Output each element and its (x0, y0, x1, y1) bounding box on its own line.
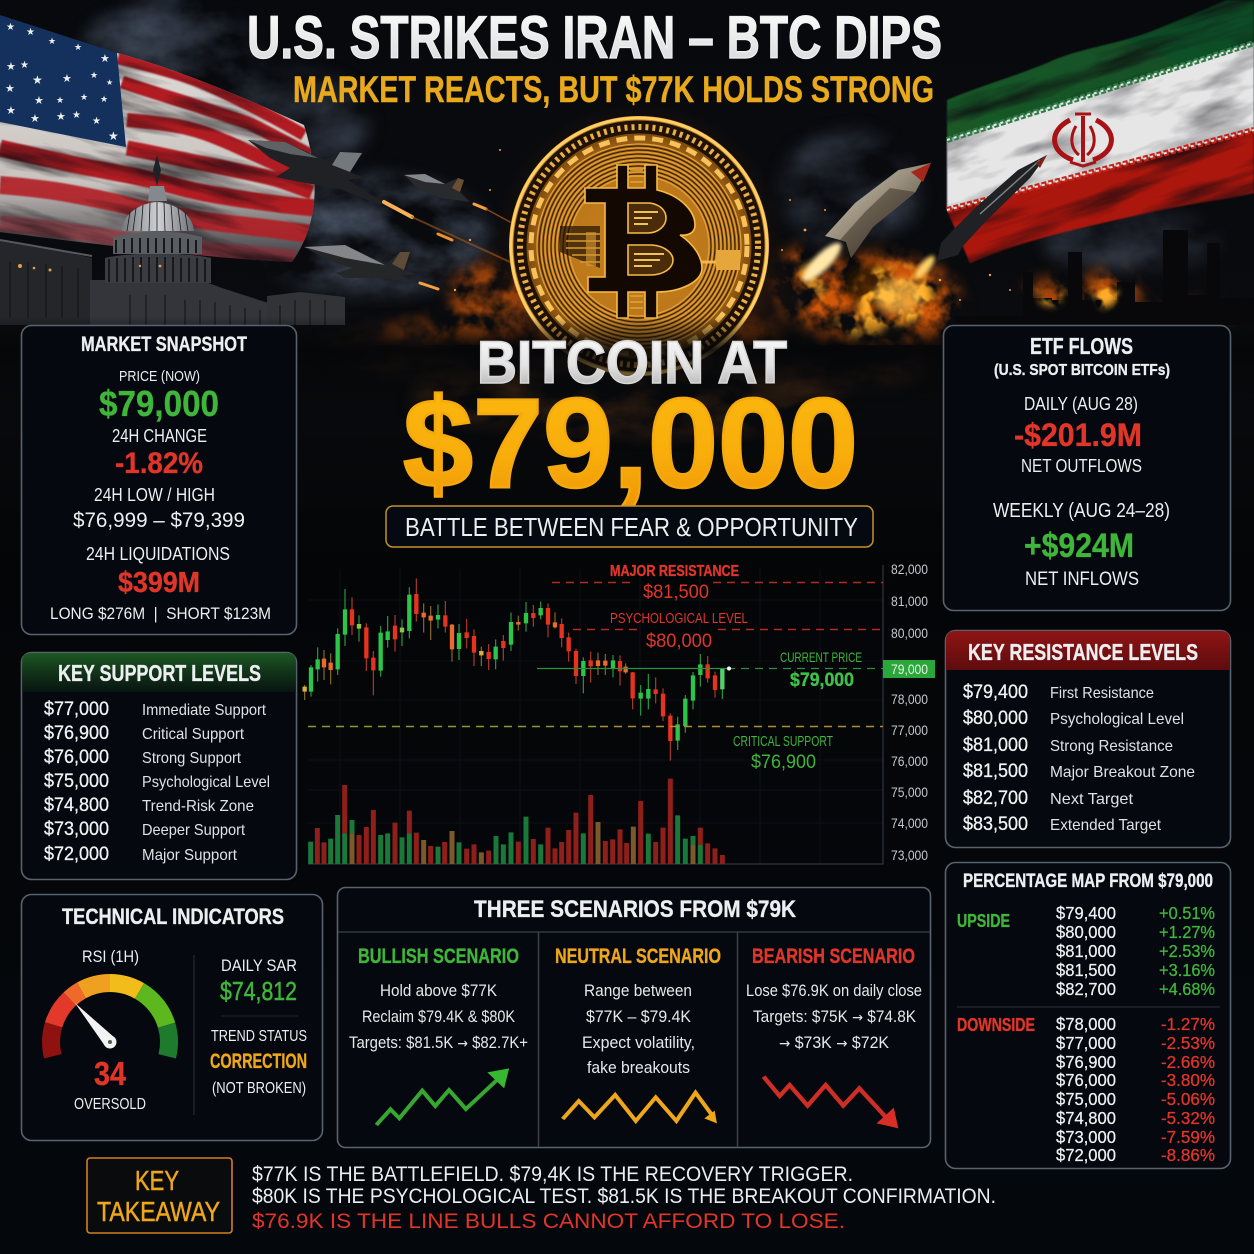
background art: storm clouds (80, 0, 1215, 440)
panel: key resistance levels: $80,000 (963, 708, 1028, 729)
column: bearish scenario (746, 945, 922, 1128)
panel: percentage map: $78,000 (1056, 1014, 1116, 1034)
level line: major resistance: MAJOR RESISTANCE (610, 563, 739, 580)
panel: technical indicators (22, 894, 322, 1140)
level line: critical support: $76,900 (751, 752, 816, 773)
panel: percentage map: -7.59% (1161, 1127, 1215, 1147)
panel: key resistance levels: $79,400 (963, 682, 1028, 703)
panel: three scenarios (338, 888, 930, 1148)
heading: Bitcoin at: BITCOIN AT (477, 329, 787, 396)
jet three (304, 245, 416, 283)
panel: technical indicators: OVERSOLD (74, 1096, 146, 1113)
panel: percentage map: $82,700 (1056, 979, 1116, 999)
panel: key support levels: Critical Support (142, 726, 245, 743)
panel: key support levels (22, 652, 296, 880)
chart: BTC candlesticks with levels (305, 561, 935, 864)
panel: market snapshot: -1.82% (115, 447, 203, 480)
callout: key takeaway badge: TAKEAWAY (97, 1196, 220, 1227)
panel: percentage map: -2.53% (1161, 1033, 1215, 1053)
level line: current price: $79,000 (790, 670, 854, 691)
stars on the canton: ★ (30, 113, 40, 125)
price axis labels: 82,000 (891, 561, 928, 577)
panel: key resistance levels: First Resistance (1050, 685, 1154, 702)
panel: market snapshot: $76,999 – $79,399 (73, 509, 245, 532)
missile flames (798, 238, 938, 286)
column: bearish scenario: Lose $76.9K on daily close (746, 982, 922, 1000)
panel: percentage map: UPSIDE (957, 911, 1010, 931)
panel: key resistance levels: $81,000 (963, 735, 1028, 756)
title: U.S. STRIKES IRAN – BTC DIPS (247, 4, 942, 71)
panel: percentage map (946, 862, 1230, 1168)
stars on the canton: ★ (72, 110, 81, 121)
illustration: Iranian flag (946, 0, 1254, 264)
level line: current price: CURRENT PRICE (780, 649, 862, 665)
panel: percentage map: $73,000 (1056, 1127, 1116, 1147)
illustration: Capitol building (0, 155, 345, 325)
stars on the canton: ★ (90, 70, 98, 80)
banner: battle between fear and opportunity (386, 506, 873, 547)
stars on the canton: ★ (48, 36, 56, 46)
arrow: sideways (563, 1093, 717, 1123)
level line: major resistance: $81,500 (643, 582, 709, 603)
panel: percentage map: -5.06% (1161, 1089, 1215, 1109)
stars on the canton: ★ (34, 95, 44, 107)
price axis labels: 77,000 (891, 722, 928, 738)
stars on the canton: ★ (6, 105, 16, 117)
callout: key takeaway badge (87, 1158, 232, 1233)
left wing (0, 240, 92, 325)
price axis labels: 80,000 (891, 625, 928, 641)
illustration: city skyline on fire (378, 230, 1232, 345)
stars on the canton: ★ (100, 53, 110, 65)
stars on the canton: ★ (56, 111, 66, 123)
level line: critical support: CRITICAL SUPPORT (733, 733, 833, 750)
panel: market snapshot (22, 326, 296, 634)
column: bullish scenario: BULLISH SCENARIO (358, 945, 519, 968)
jet one (248, 140, 384, 205)
arrow: falling (764, 1077, 898, 1128)
panel: key support levels: Deeper Support (142, 822, 245, 839)
panel: key support levels: $76,000 (44, 747, 109, 768)
panel: key support levels: KEY SUPPORT LEVELS (58, 660, 261, 686)
text block: key takeaway statements: $80K IS THE PSYCHOLOGICAL TEST. $81.5K IS THE BREAKOUT CONFIRMATION. (252, 1185, 996, 1208)
panel: percentage map: $77,000 (1056, 1033, 1116, 1053)
level line: psychological level: $80,000 (646, 631, 712, 652)
panel: market snapshot: $79,000 (99, 383, 219, 424)
panel: percentage map: +2.53% (1159, 941, 1215, 961)
subtitle: MARKET REACTS, BUT $77K HOLDS STRONG (293, 69, 934, 110)
panel: key support levels: $76,900 (44, 723, 109, 744)
panel: key resistance levels (946, 630, 1230, 848)
price axis labels: 79,000 (891, 661, 928, 677)
column: bullish scenario: Hold above $77K (380, 982, 497, 1000)
panel: key resistance levels: Psychological Level (1050, 711, 1184, 728)
price axis labels: 78,000 (891, 691, 928, 707)
panel: key resistance levels: Extended Target (1050, 817, 1162, 834)
panel: technical indicators: CORRECTION (210, 1050, 307, 1073)
icon: emblem of Iran (1055, 114, 1111, 166)
panel: technical indicators: RSI (1H) (82, 947, 139, 966)
panel: ETF flows (944, 326, 1230, 610)
price axis labels: 74,000 (891, 815, 928, 831)
panel: percentage map: $79,400 (1056, 903, 1116, 923)
panel: key support levels: Strong Support (142, 750, 242, 767)
panel: percentage map: +4.68% (1159, 979, 1215, 999)
panel: percentage map: $75,000 (1056, 1089, 1116, 1109)
panel: ETF flows: NET OUTFLOWS (1021, 456, 1142, 476)
panel: key resistance levels: Major Breakout Zone (1050, 764, 1195, 781)
illustration: missiles (798, 155, 1047, 286)
column: neutral scenario: $77K – $79.4K (586, 1008, 691, 1026)
column: neutral scenario: fake breakouts (587, 1059, 690, 1077)
panel: market snapshot: MARKET SNAPSHOT (81, 333, 247, 356)
column: bullish scenario: Targets: $81.5K → $82.7K+ (349, 1034, 528, 1052)
missile one (825, 163, 931, 258)
panel: key support levels: Immediate Support (142, 702, 267, 719)
stars on the canton: ★ (5, 83, 15, 95)
illustration: American flag (0, 15, 315, 262)
stars on the canton: ★ (62, 73, 72, 85)
panel: percentage map: +3.16% (1159, 960, 1215, 980)
panel: ETF flows: -$201.9M (1014, 417, 1142, 453)
panel: percentage map: $81,500 (1056, 960, 1116, 980)
panel: key support levels: $73,000 (44, 819, 109, 840)
panel: technical indicators: $74,812 (220, 976, 297, 1006)
panel: key support levels: $74,800 (44, 795, 109, 816)
drum with colonnades (105, 254, 211, 283)
panel: percentage map: $74,800 (1056, 1108, 1116, 1128)
column: bullish scenario (349, 945, 528, 1125)
panel: key support levels: Trend-Risk Zone (142, 798, 254, 815)
stars on the canton: ★ (92, 116, 101, 127)
text block: key takeaway statements: $77K IS THE BATTLEFIELD. $79,4K IS THE RECOVERY TRIGGER. (252, 1163, 853, 1186)
panel: percentage map: -5.32% (1161, 1108, 1215, 1128)
illustration: fighter jets (248, 140, 510, 289)
illustration: gold bitcoin coin (491, 98, 787, 394)
missile trails (384, 202, 510, 289)
price axis labels: 76,000 (891, 753, 928, 769)
level line: psychological level (573, 610, 883, 652)
panel: key support levels: $72,000 (44, 844, 109, 865)
price axis labels: 81,000 (891, 593, 928, 609)
stars on the canton: ★ (74, 42, 82, 52)
stars on the canton: ★ (20, 60, 29, 71)
column: bearish scenario: Targets: $75K → $74.8K (753, 1008, 916, 1026)
stars on the canton: ★ (32, 73, 43, 87)
right wing (267, 292, 345, 325)
candlesticks (305, 578, 722, 761)
text block: key takeaway statements (252, 1163, 996, 1233)
panel: technical indicators: (NOT BROKEN) (212, 1080, 306, 1097)
panel: percentage map: -3.80% (1161, 1070, 1215, 1090)
column: neutral scenario: NEUTRAL SCENARIO (555, 945, 721, 968)
panel: market snapshot: 24H CHANGE (112, 426, 207, 446)
panel: percentage map: +0.51% (1159, 903, 1215, 923)
panel: percentage map: -2.66% (1161, 1052, 1215, 1072)
panel: key support levels: $77,000 (44, 699, 109, 720)
panel: percentage map: $80,000 (1056, 922, 1116, 942)
panel: technical indicators: TECHNICAL INDICATORS (62, 904, 284, 929)
jet two (404, 174, 470, 202)
stars on the canton: ★ (26, 27, 35, 38)
panel: ETF flows: WEEKLY (AUG 24–28) (993, 500, 1170, 522)
price axis labels: 75,000 (891, 784, 928, 800)
text block: key takeaway statements: $76.9K IS THE LINE BULLS CANNOT AFFORD TO LOSE. (252, 1210, 845, 1233)
panel: key support levels: Major Support (142, 847, 238, 864)
panel: market snapshot: 24H LOW / HIGH (94, 485, 215, 505)
panel: percentage map: -8.86% (1161, 1145, 1215, 1165)
missile two (937, 155, 1047, 261)
panel: key support levels: $75,000 (44, 771, 109, 792)
panel: key resistance levels: $82,700 (963, 788, 1028, 809)
level line: psychological level: PSYCHOLOGICAL LEVEL (610, 610, 748, 627)
level line: current price (537, 649, 883, 691)
panel: market snapshot: LONG $276M | SHORT $123M (50, 604, 271, 623)
panel: three scenarios: THREE SCENARIOS FROM $79K (474, 896, 797, 923)
panel: key resistance levels: $83,500 (963, 814, 1028, 835)
art fade behind headline (0, 316, 1254, 420)
panel: ETF flows: ETF FLOWS (1030, 333, 1133, 359)
arrow: rising (376, 1068, 509, 1125)
stars on the canton: ★ (108, 129, 119, 143)
price axis labels (883, 561, 935, 863)
level line: major resistance (552, 563, 883, 603)
panel: ETF flows: DAILY (AUG 28) (1024, 394, 1138, 414)
stars on the canton: ★ (100, 94, 108, 104)
central block (90, 280, 290, 325)
panel: percentage map: $76,900 (1056, 1052, 1116, 1072)
icon: bitcoin B symbol (585, 165, 740, 318)
panel: market snapshot: 24H LIQUIDATIONS (86, 544, 230, 564)
panel: key support levels: Psychological Level (142, 774, 270, 791)
stars on the canton: ★ (80, 92, 88, 102)
panel: percentage map: $81,000 (1056, 941, 1116, 961)
panel: market snapshot: PRICE (NOW) (119, 368, 200, 385)
heading: big price: $79,000 (403, 372, 858, 514)
volume bars (311, 779, 722, 864)
panel: ETF flows: NET INFLOWS (1025, 569, 1139, 590)
panel: key resistance levels: Strong Resistance (1050, 738, 1173, 755)
chart: RSI gauge (51, 983, 169, 1056)
panel: key resistance levels: Next Target (1050, 791, 1134, 808)
panel: ETF flows: +$924M (1024, 527, 1134, 565)
panel: percentage map: $76,000 (1056, 1070, 1116, 1090)
panel: percentage map: -1.27% (1161, 1014, 1215, 1034)
panel: technical indicators: 34 (94, 1055, 127, 1092)
column: neutral scenario: Expect volatility, (582, 1034, 695, 1052)
illustration: explosions (454, 149, 1123, 342)
panel: key resistance levels: $81,500 (963, 761, 1028, 782)
panel: percentage map: +1.27% (1159, 922, 1215, 942)
callout: key takeaway badge: KEY (135, 1165, 179, 1196)
panel: market snapshot: $399M (118, 567, 200, 599)
column: neutral scenario (555, 945, 721, 1123)
banner: battle between fear and opportunity: BATTLE BETWEEN FEAR & OPPORTUNITY (405, 512, 858, 542)
column: bullish scenario: Reclaim $79.4K & $80K (362, 1008, 515, 1026)
panel: ETF flows: (U.S. SPOT BITCOIN ETFs) (994, 362, 1170, 379)
stars on the canton: ★ (106, 78, 113, 87)
column: bearish scenario: BEARISH SCENARIO (752, 945, 915, 968)
panel: percentage map: $72,000 (1056, 1145, 1116, 1165)
panel: percentage map: DOWNSIDE (957, 1015, 1035, 1035)
column: bearish scenario: → $73K → $72K (779, 1034, 889, 1052)
stars on the canton: ★ (6, 22, 15, 33)
price axis labels: 73,000 (891, 847, 928, 863)
level line: critical support (308, 726, 883, 773)
panel: technical indicators: TREND STATUS (211, 1028, 307, 1045)
stars on the canton (5, 22, 119, 143)
panel: technical indicators: DAILY SAR (221, 956, 297, 975)
stars on the canton: ★ (56, 95, 64, 105)
stars on the canton: ★ (6, 61, 16, 73)
column: neutral scenario: Range between (584, 982, 692, 1000)
